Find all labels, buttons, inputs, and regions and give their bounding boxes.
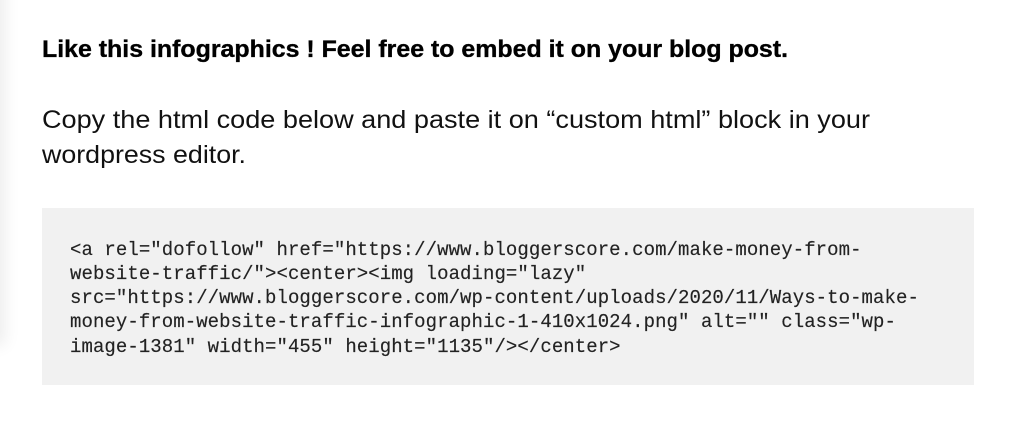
embed code text: money-from-website-traffic-infographic-1-410x1024.png" alt="" class="wp- bbox=[70, 311, 896, 333]
instruction paragraph bbox=[41, 106, 870, 169]
embed code text: image-1381" width="455" height="1135"/></center> bbox=[70, 336, 621, 358]
embed code text bbox=[70, 239, 919, 358]
instruction paragraph: Copy the html code below and paste it on “custom html” block in your bbox=[42, 106, 870, 134]
heading: Like this infographics ! Feel free to embed it on your blog post. bbox=[42, 36, 788, 63]
instruction paragraph: wordpress editor. bbox=[41, 141, 246, 169]
embed code text: website-traffic/"><center><img loading="lazy" bbox=[70, 263, 586, 285]
embed code text: src="https://www.bloggerscore.com/wp-content/uploads/2020/11/Ways-to-make- bbox=[70, 287, 919, 309]
embed code text: <a rel="dofollow" href="https://www.bloggerscore.com/make-money-from- bbox=[70, 239, 862, 261]
code block background bbox=[42, 208, 974, 385]
code block panel bbox=[42, 208, 974, 385]
